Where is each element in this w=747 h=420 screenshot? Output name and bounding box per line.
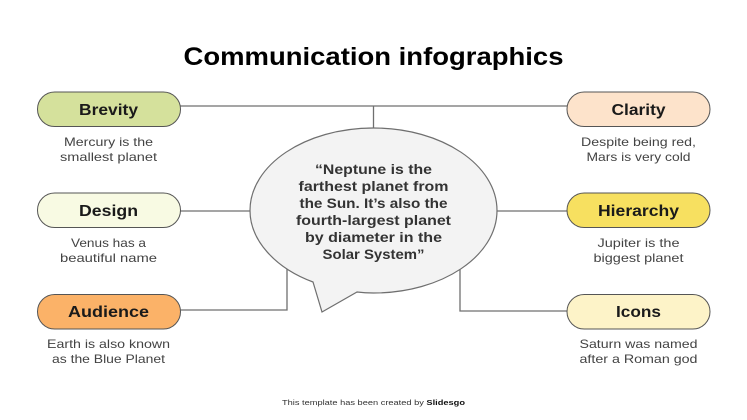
- panel: Brevity: Brevity: [79, 102, 138, 119]
- panel: Icons: [567, 294, 710, 366]
- panel: Brevity: [38, 92, 180, 164]
- panel: Hierarchy: biggest planet: [594, 251, 684, 265]
- connector lines: [180, 106, 567, 311]
- panel: Clarity: [567, 92, 710, 164]
- title: Communication infographics: [184, 43, 564, 71]
- quote text: [296, 161, 451, 262]
- panel: Hierarchy: Hierarchy: [598, 203, 679, 220]
- quote text: fourth-largest planet: [296, 212, 451, 228]
- quote text: Solar System”: [322, 246, 424, 262]
- panel: Design: beautiful name: [60, 251, 157, 265]
- panel: Design: Design: [79, 203, 138, 220]
- panel: Clarity: Despite being red,: [581, 135, 696, 149]
- panel: Hierarchy: [567, 193, 710, 265]
- panel: Hierarchy: Jupiter is the: [598, 236, 680, 250]
- panel: Audience: Audience: [68, 304, 149, 321]
- panel: Audience: [38, 294, 180, 366]
- panel: Icons: Saturn was named: [580, 337, 698, 351]
- panel: Icons: Icons: [616, 304, 661, 321]
- panel: Icons: after a Roman god: [580, 352, 698, 366]
- speech bubble: [250, 128, 497, 312]
- panel: Design: Venus has a: [71, 236, 146, 250]
- panel: Brevity: Mercury is the: [64, 135, 153, 149]
- panel: Design: [38, 193, 180, 265]
- quote text: the Sun. It’s also the: [300, 195, 448, 211]
- quote text: farthest planet from: [298, 178, 448, 194]
- panel: Brevity: smallest planet: [60, 150, 158, 164]
- quote text: by diameter in the: [305, 229, 442, 245]
- panel: Clarity: Mars is very cold: [586, 150, 690, 164]
- quote text: “Neptune is the: [315, 161, 432, 177]
- panel: Audience: Earth is also known: [47, 337, 170, 351]
- panel: Clarity: Clarity: [612, 102, 666, 119]
- panel: Audience: as the Blue Planet: [52, 352, 166, 366]
- footer credit: This template has been created by Slidesgo: [282, 398, 466, 407]
